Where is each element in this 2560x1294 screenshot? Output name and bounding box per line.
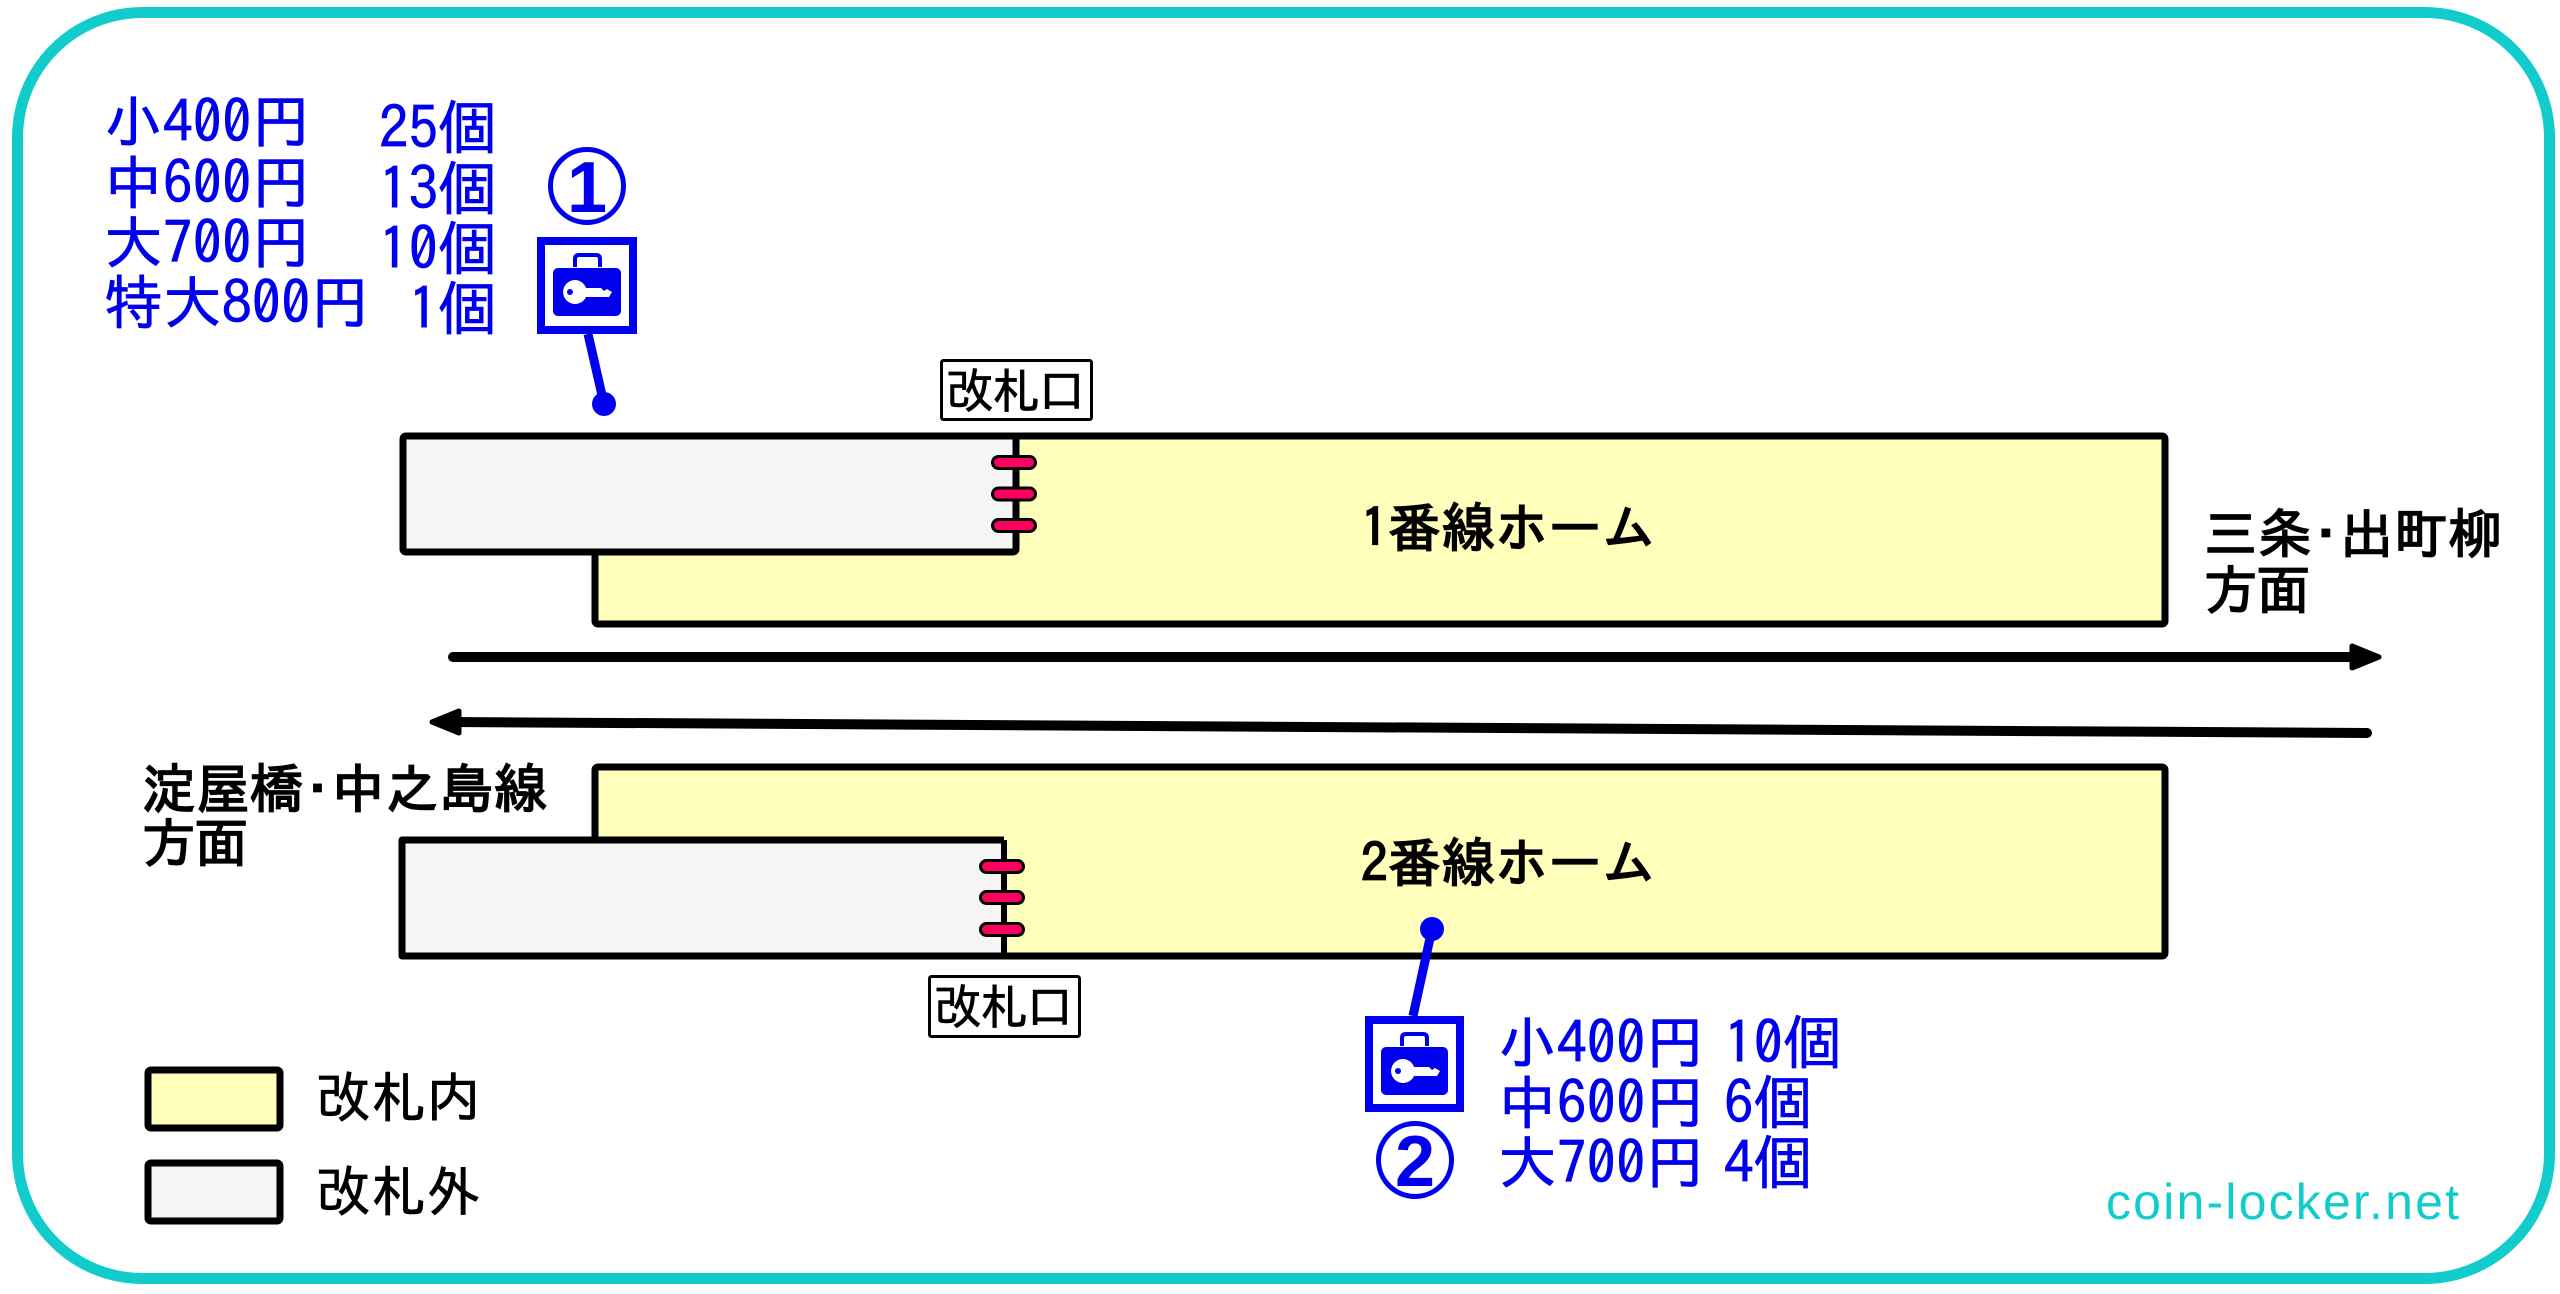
direction label left xyxy=(142,762,548,869)
locker 1 price list: 中600円 xyxy=(104,153,310,212)
direction label left: 方面 xyxy=(142,816,248,869)
platform 2 paid area xyxy=(595,767,2165,956)
direction label left: 淀屋橋･中之島線 xyxy=(142,762,548,815)
locker 2 price list: 中600円 xyxy=(1498,1073,1704,1132)
locker 2 price list xyxy=(1498,1013,1842,1192)
legend: outside gates xyxy=(148,1163,481,1221)
arrow: toward Sanjo and Demachiyanagi xyxy=(453,646,2379,668)
locker 2 number: 2 xyxy=(1395,1122,1435,1202)
locker 1 counts: 13個 xyxy=(379,159,497,218)
platform 2 gate wall xyxy=(1001,840,1007,956)
locker 1 counts: 25個 xyxy=(379,98,497,157)
direction label right xyxy=(2204,507,2502,616)
platform 2 gates xyxy=(980,860,1024,936)
direction label right: 方面 xyxy=(2204,563,2310,616)
direction label right: 三条･出町柳 xyxy=(2204,507,2502,560)
locker 2 price list: 4個 xyxy=(1724,1133,1812,1192)
locker 2 price list: 大700円 xyxy=(1498,1133,1704,1192)
locker 1 price list: 小400円 xyxy=(104,92,310,151)
ticket gate label bottom: 改札口 xyxy=(934,982,1074,1030)
locker 1 price list: 特大800円 xyxy=(104,273,370,332)
locker 2 number xyxy=(1378,1122,1452,1202)
platform 1 paid area xyxy=(595,436,2165,624)
locker 2 price list: 6個 xyxy=(1724,1073,1812,1132)
arrow: toward Yodoyabashi and Nakanoshima line xyxy=(432,711,2367,733)
platform 1 label: 1番線ホーム xyxy=(1361,501,1655,554)
locker 1 counts: 10個 xyxy=(379,219,497,278)
legend: inside gates xyxy=(148,1069,481,1128)
locker 1 number: 1 xyxy=(567,148,607,228)
platform 2 unpaid area xyxy=(402,840,1004,956)
legend: inside gates: 改札内 xyxy=(316,1069,481,1124)
ticket gate label top: 改札口 xyxy=(946,366,1086,414)
platform 1 unpaid area xyxy=(403,436,1016,552)
locker 2 price list: 10個 xyxy=(1724,1013,1842,1072)
locker 1 price list: 大700円 xyxy=(104,213,310,272)
panel: platform 1 xyxy=(403,436,2165,624)
locker 1 number xyxy=(550,148,624,228)
platform 2 label: 2番線ホーム xyxy=(1361,836,1655,889)
locker 1 counts xyxy=(379,98,497,338)
icon: locker 1 sign xyxy=(541,241,633,416)
legend: outside gates: 改札外 xyxy=(316,1163,481,1218)
platform 1 gates xyxy=(992,456,1036,532)
locker 2 price list: 小400円 xyxy=(1498,1013,1704,1072)
panel: platform 2 xyxy=(402,767,2165,956)
icon: locker 2 sign xyxy=(1369,917,1460,1108)
locker 1 counts: 1個 xyxy=(408,279,497,338)
site credit: coin-locker.net xyxy=(2106,1174,2459,1230)
locker 1 price list xyxy=(104,92,370,332)
